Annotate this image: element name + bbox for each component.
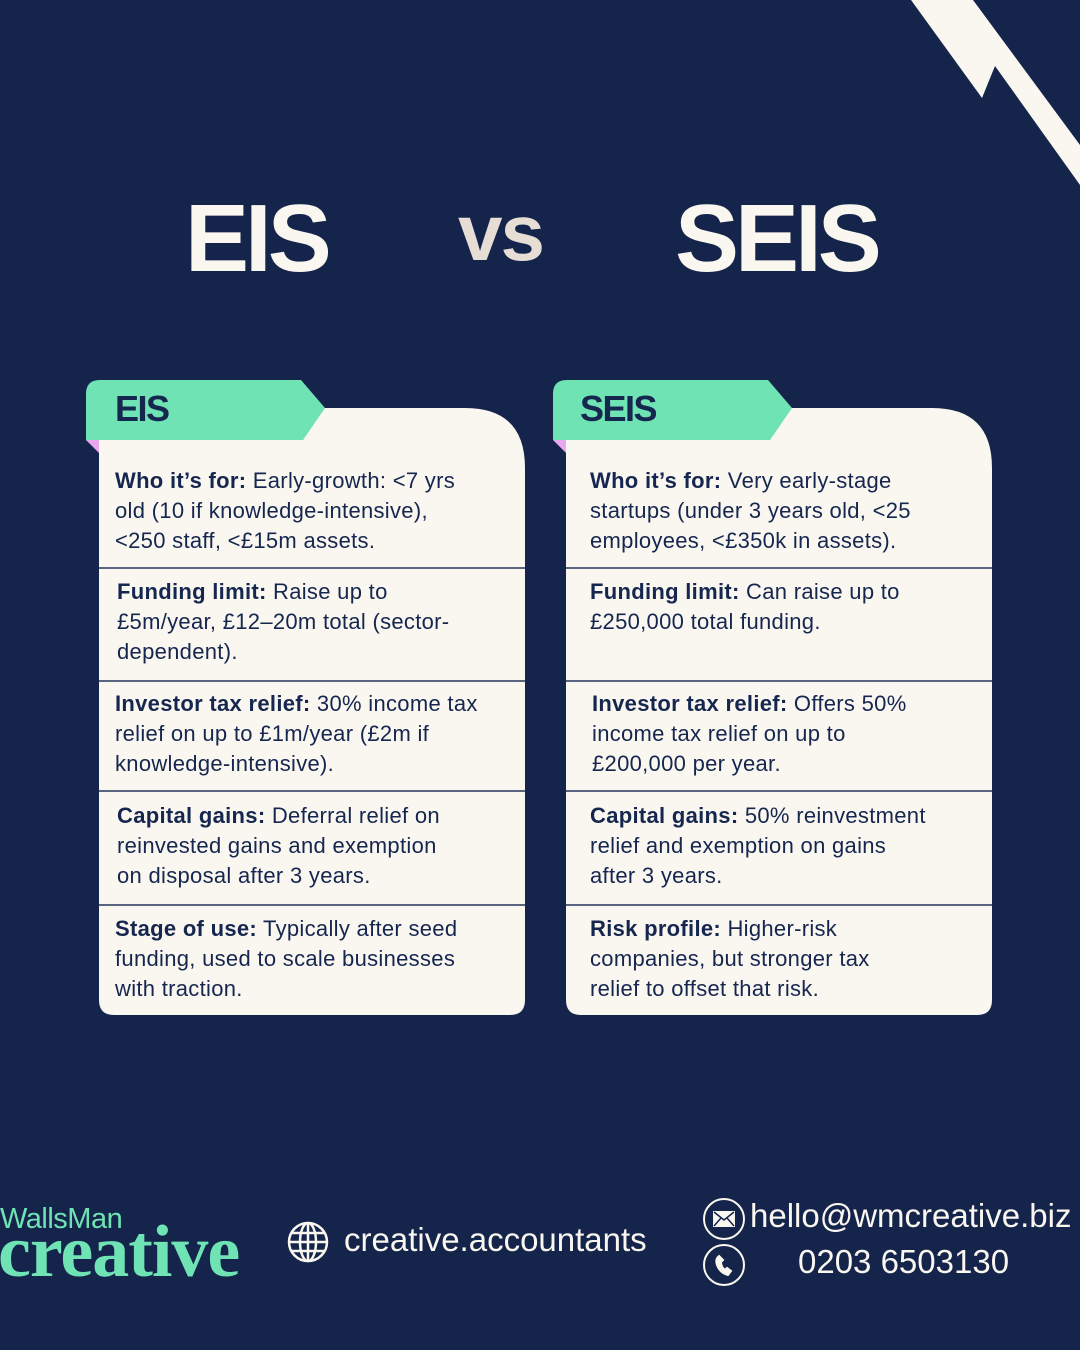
- row: capital gains: relief and exemption on gains: [590, 833, 886, 858]
- row: who it's for: startups (under 3 years old, <25: [590, 498, 911, 523]
- row: who it's for: Who it’s for: Early-growth: <7 yrs: [115, 468, 455, 493]
- row: capital gains: Capital gains: Deferral relief on: [117, 803, 440, 828]
- row: investor tax relief: relief on up to £1m/year (£2m if: [115, 721, 429, 746]
- title: SEIS: SEIS: [675, 185, 878, 292]
- row: capital gains: on disposal after 3 years.: [117, 863, 371, 888]
- title: vs: vs: [458, 188, 543, 277]
- row: investor tax relief: Investor tax relief: Offers 50%: [592, 691, 907, 716]
- row: investor tax relief: [115, 691, 478, 776]
- row: who it's for: [590, 468, 911, 553]
- icon: phone: [703, 1244, 745, 1286]
- panel: SEIS card: [553, 380, 992, 1015]
- row: who it's for: old (10 if knowledge-intensive),: [115, 498, 428, 523]
- row: funding limit: £5m/year, £12–20m total (sector-: [117, 609, 449, 634]
- email text: hello@wmcreative.biz: [750, 1197, 1071, 1234]
- row: stage of use: with traction.: [115, 976, 243, 1001]
- row: capital gains: [117, 803, 440, 888]
- row: risk profile: companies, but stronger tax: [590, 946, 870, 971]
- row: funding limit: dependent).: [117, 639, 238, 664]
- decorative lightning bolt: [911, 0, 1080, 185]
- icon: globe: [288, 1222, 328, 1262]
- row: who it's for: <250 staff, <£15m assets.: [115, 528, 375, 553]
- panel: EIS card: [86, 380, 525, 1015]
- row: funding limit: [590, 579, 900, 634]
- row: risk profile: Risk profile: Higher-risk: [590, 916, 837, 941]
- row: who it's for: employees, <£350k in assets).: [590, 528, 896, 553]
- logo: WallsMan creative: creative: [0, 1211, 239, 1293]
- website text: creative.accountants: [344, 1221, 647, 1258]
- row: funding limit: Funding limit: Can raise up to: [590, 579, 900, 604]
- row: investor tax relief: £200,000 per year.: [592, 751, 781, 776]
- tab heading: SEIS: SEIS: [580, 388, 656, 429]
- row: stage of use: Stage of use: Typically after seed: [115, 916, 457, 941]
- row: investor tax relief: Investor tax relief: 30% income tax: [115, 691, 478, 716]
- phone text: 0203 6503130: [798, 1243, 1009, 1280]
- row: stage of use: funding, used to scale businesses: [115, 946, 455, 971]
- row: investor tax relief: [592, 691, 907, 776]
- title: EIS: EIS: [185, 185, 328, 292]
- row: risk profile: relief to offset that risk.: [590, 976, 819, 1001]
- row: investor tax relief: knowledge-intensive).: [115, 751, 334, 776]
- tab heading: EIS: EIS: [115, 388, 169, 429]
- row: capital gains: [590, 803, 926, 888]
- row: funding limit: Funding limit: Raise up to: [117, 579, 388, 604]
- row: capital gains: Capital gains: 50% reinvestment: [590, 803, 926, 828]
- row: investor tax relief: income tax relief on up to: [592, 721, 846, 746]
- row: stage of use: [115, 916, 457, 1001]
- icon: email: [703, 1198, 745, 1240]
- row: risk profile: [590, 916, 870, 1001]
- row: who it's for: [115, 468, 455, 553]
- row: capital gains: reinvested gains and exemption: [117, 833, 437, 858]
- row: funding limit: [117, 579, 449, 664]
- logo: WallsMan creative: WallsMan: [0, 1203, 122, 1235]
- row: who it's for: Who it’s for: Very early-stage: [590, 468, 892, 493]
- row: capital gains: after 3 years.: [590, 863, 723, 888]
- row: funding limit: £250,000 total funding.: [590, 609, 821, 634]
